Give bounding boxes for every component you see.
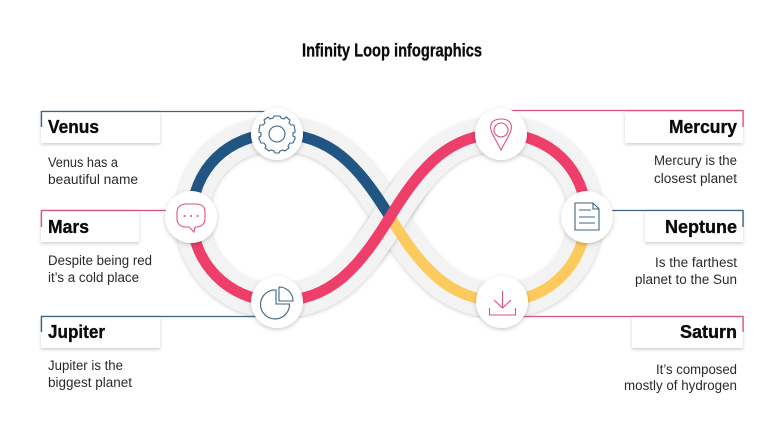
pink arc crossing: [277, 134, 586, 301]
panel: Mars: it’s a cold place: [48, 270, 139, 285]
panel: Venus: [41, 112, 160, 187]
panel: Mars: [41, 210, 152, 285]
connector: Mercury: [510, 110, 743, 127]
panel: Neptune: Is the farthest: [655, 255, 737, 270]
blue arc: [192, 134, 390, 217]
grey track overlap at crossing: [355, 177, 428, 262]
panel: Mercury: [625, 110, 743, 186]
pink arc left: [192, 217, 277, 301]
connector: Saturn: [520, 316, 743, 332]
grey track: [192, 134, 586, 301]
panel: Saturn: It’s composed: [656, 362, 737, 377]
icon: gear: [251, 108, 303, 160]
panel: Saturn: [624, 316, 743, 393]
panel: Venus: Venus has a: [48, 155, 118, 170]
title: Infinity Loop infographics: [302, 40, 482, 60]
infinity loop: [192, 134, 586, 301]
panel: Mercury: Mercury is the: [654, 153, 737, 168]
panel: Neptune: [635, 210, 743, 287]
yellow arc: [390, 217, 586, 301]
connector: Neptune: [610, 210, 743, 227]
icon: document: [561, 191, 613, 243]
panel: Venus: beautiful name: [48, 172, 138, 187]
icon: download: [476, 276, 528, 328]
panel: Mercury: Mercury: [669, 116, 738, 137]
connector: Venus: [42, 112, 268, 127]
connector: Jupiter: [42, 316, 258, 332]
panel: Jupiter: Jupiter is the: [48, 358, 123, 373]
panel: Mars: Despite being red: [48, 253, 152, 268]
connector: Mars: [42, 210, 170, 227]
panel: Venus: Venus: [48, 116, 99, 137]
icon: pie chart: [251, 276, 303, 328]
icon: speech bubble: [165, 191, 217, 243]
icon: map pin: [475, 108, 527, 160]
panel: Jupiter: Jupiter: [48, 321, 105, 342]
panel: Saturn: mostly of hydrogen: [624, 378, 737, 393]
panel: Neptune: Neptune: [665, 216, 737, 237]
panel: Neptune: planet to the Sun: [635, 272, 737, 287]
panel: Saturn: Saturn: [680, 321, 737, 342]
panel: Mercury: closest planet: [654, 171, 737, 186]
panel: Jupiter: [41, 316, 160, 390]
panel: Mars: Mars: [48, 216, 89, 237]
panel: Jupiter: biggest planet: [48, 375, 132, 390]
